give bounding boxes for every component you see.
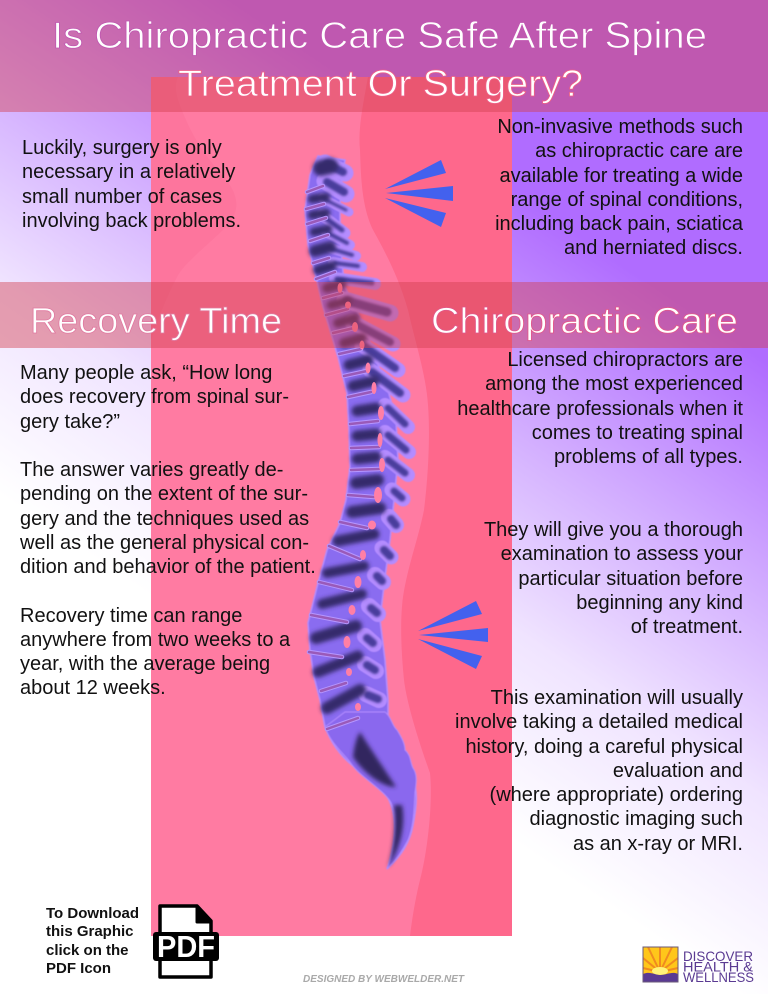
- text: recovery time: Recovery time can range: [20, 604, 242, 626]
- text: recovery time: does recovery from spinal sur-: [20, 386, 289, 408]
- spine column: [305, 156, 416, 869]
- download note: this Graphic: [46, 923, 134, 940]
- text: intro left: [22, 137, 241, 232]
- logo: discover health and wellness: HEALTH &: [683, 958, 754, 974]
- icon: PDF: PDF: [157, 929, 215, 964]
- text: chiropractic care paragraph 3: as an x-ray or MRI.: [573, 832, 743, 854]
- text: chiropractic care paragraph 1: [457, 349, 743, 468]
- text: chiropractic care paragraph 3: (where appropriate) ordering: [490, 784, 743, 806]
- vertebral foramina: [338, 283, 385, 711]
- text: intro right: as chiropractic care are: [535, 140, 743, 162]
- logo: discover health and wellness: DISCOVER: [683, 948, 753, 964]
- text: chiropractic care paragraph 3: evaluation and: [613, 760, 743, 782]
- text: chiropractic care paragraph 1: comes to treating spinal: [532, 422, 743, 444]
- logo: discover health and wellness: [643, 947, 754, 985]
- text: recovery time: The answer varies greatly de-: [20, 459, 283, 481]
- sacrum and tail: [325, 712, 416, 869]
- text: chiropractic care paragraph 3: This examination will usually: [491, 687, 743, 709]
- text: intro left: involving back problems.: [22, 210, 241, 232]
- title: Treatment Or Surgery?: [178, 63, 583, 104]
- text: intro left: Luckily, surgery is only: [22, 137, 222, 159]
- text: recovery time: Many people ask, “How long: [20, 362, 272, 384]
- download note: [46, 905, 139, 977]
- download note: To Download: [46, 905, 139, 922]
- text: intro right: including back pain, sciatica: [495, 213, 743, 235]
- text: intro right: Non-invasive methods such: [497, 116, 743, 138]
- spinous processes: outer halo: [322, 163, 409, 700]
- text: intro right: available for treating a wide: [500, 164, 743, 186]
- title band: [0, 0, 768, 112]
- text: intro right: range of spinal conditions,: [511, 189, 743, 211]
- middle heading band: [0, 282, 768, 348]
- left body contour: [151, 77, 236, 340]
- pink panel: [151, 77, 512, 936]
- body silhouette: [151, 77, 431, 936]
- text: recovery time: well as the general physical con-: [20, 532, 309, 554]
- credit line: DESIGNED BY WEBWELDER.NET: [303, 974, 465, 985]
- text: chiropractic care paragraph 2: particular situation before: [518, 568, 743, 590]
- vertebra shadows: [312, 166, 403, 867]
- text: chiropractic care paragraph 3: diagnostic imaging such: [530, 808, 743, 830]
- headings: [30, 15, 738, 341]
- spine illustration: [305, 156, 416, 869]
- text: chiropractic care paragraph 2: They will give you a thorough: [484, 519, 743, 541]
- text: intro right: and herniated discs.: [564, 237, 743, 259]
- intervertebral discs: [306, 186, 379, 729]
- text: intro right: [495, 116, 743, 259]
- text: chiropractic care paragraph 3: history, doing a careful physical: [465, 736, 743, 758]
- text: intro left: necessary in a relatively: [22, 161, 235, 183]
- text: recovery time: about 12 weeks.: [20, 677, 166, 699]
- title: [52, 15, 707, 104]
- logo: discover health and wellness: WELLNESS: [683, 969, 754, 985]
- text: chiropractic care paragraph 2: of treatment.: [631, 616, 743, 638]
- text: chiropractic care paragraph 1: problems of all types.: [554, 446, 743, 468]
- arrow fan: lower: [418, 601, 488, 669]
- text: chiropractic care paragraph 2: [484, 519, 743, 638]
- download note: PDF Icon: [46, 960, 111, 977]
- download note: click on the: [46, 942, 129, 959]
- text: intro left: small number of cases: [22, 186, 222, 208]
- text: chiropractic care paragraph 2: beginning any kind: [576, 592, 743, 614]
- text: chiropractic care paragraph 1: healthcare professionals when it: [457, 398, 743, 420]
- heading: chiropractic care: Chiropractic Care: [431, 300, 738, 341]
- text: recovery time: anywhere from two weeks to a: [20, 629, 290, 651]
- text: chiropractic care paragraph 3: [455, 687, 743, 854]
- text: recovery time: dition and behavior of the patient.: [20, 556, 316, 578]
- text: recovery time: gery take?”: [20, 410, 120, 432]
- process shadows: [324, 164, 406, 699]
- text: chiropractic care paragraph 2: examination to assess your: [501, 543, 743, 565]
- text: recovery time: pending on the extent of the sur-: [20, 483, 308, 505]
- heading: recovery time: Recovery Time: [30, 300, 282, 341]
- text: chiropractic care paragraph 1: among the most experienced: [485, 373, 743, 395]
- title: Is Chiropractic Care Safe After Spine: [52, 15, 707, 56]
- arrow fan: upper: [385, 160, 453, 227]
- text: chiropractic care paragraph 3: involve taking a detailed medical: [455, 711, 743, 733]
- text: chiropractic care paragraph 1: Licensed chiropractors are: [507, 349, 743, 371]
- text: recovery time: [20, 362, 316, 699]
- text: recovery time: year, with the average being: [20, 653, 270, 675]
- text: recovery time: gery and the techniques used as: [20, 508, 309, 530]
